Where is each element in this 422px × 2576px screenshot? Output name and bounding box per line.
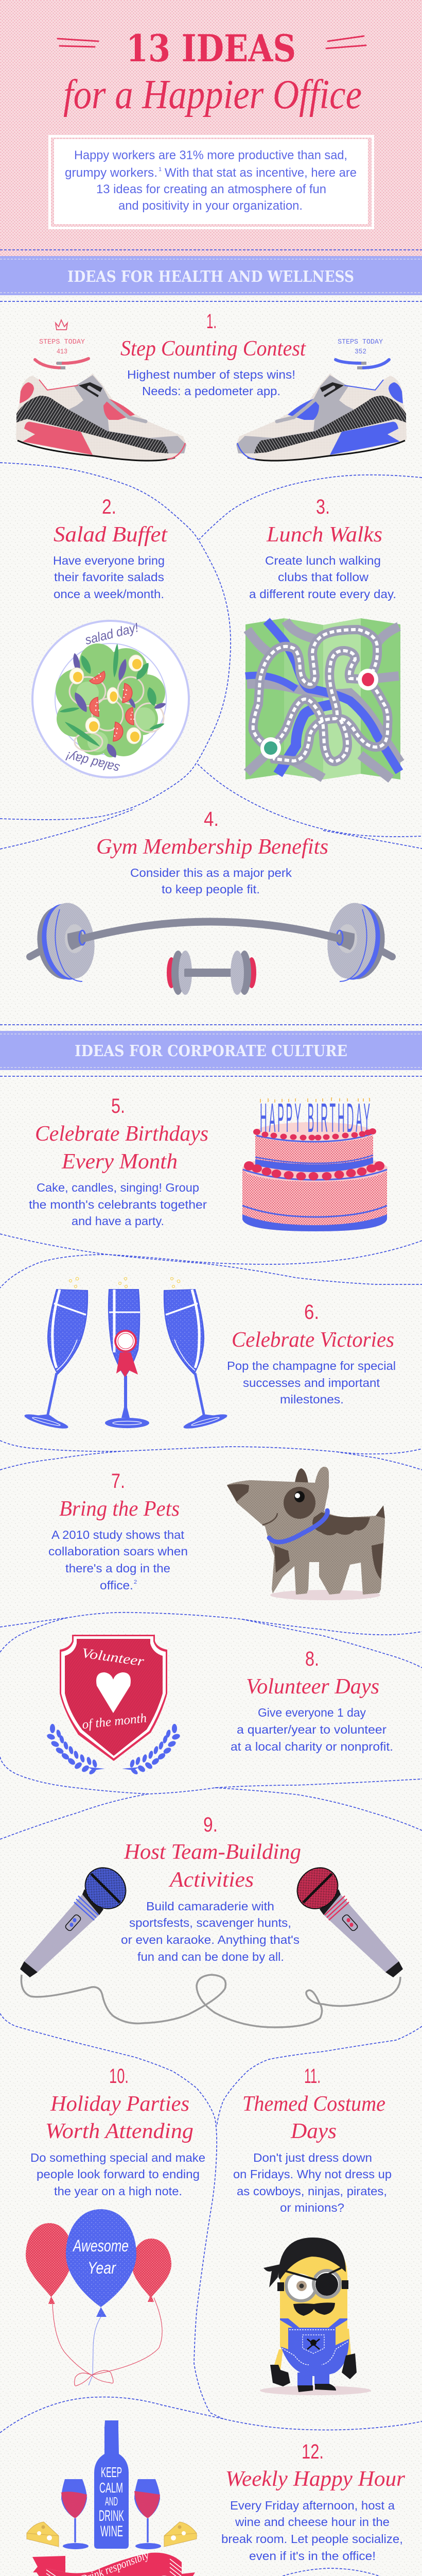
dog body [227, 1467, 385, 1595]
wreath left [46, 1724, 105, 1775]
bib and trousers [281, 2328, 349, 2376]
right step readout: STEPS TODAY [338, 338, 383, 346]
dashed dividers: ideas 9 to 11 [0, 2013, 422, 2433]
band heading: IDEAS FOR CORPORATE CULTURE [75, 1042, 347, 1060]
heading birthdays [35, 1122, 208, 1174]
body: collaboration soars when [48, 1545, 188, 1558]
intro text: and positivity in your organization. [118, 199, 303, 213]
left glass [23, 1290, 87, 1431]
shield bottom lettering: of the month [81, 1711, 147, 1732]
heading pets: Bring the Pets [59, 1497, 180, 1521]
icon: right fitness band [336, 338, 389, 368]
heading victories: Celebrate Victories [232, 1328, 394, 1352]
eye patch [285, 2268, 341, 2296]
body: successes and important [243, 1376, 380, 1389]
body: and have a party. [72, 1214, 164, 1228]
nose [227, 1484, 249, 1502]
minion body [280, 2241, 347, 2365]
left step readout: STEPS TODAY [39, 338, 85, 346]
tomato slices [86, 667, 140, 742]
lower cherries [244, 1161, 384, 1180]
cheese left [27, 2522, 59, 2547]
intro text: 13 ideas for creating an atmosphere of fun [96, 182, 326, 196]
body: wine and cheese hour in the [235, 2515, 390, 2529]
heading birthdays: Every Month [61, 1150, 178, 1174]
body: fun and can be done by all. [137, 1950, 284, 1963]
egg halves [69, 655, 143, 744]
map panels [245, 618, 284, 779]
body: break room. Let people socialize, [221, 2532, 403, 2546]
heading happy hour: Weekly Happy Hour [225, 2467, 406, 2491]
intro text: With that stat as incentive, here are [165, 166, 357, 180]
body [121, 1900, 300, 1963]
icon: wine bottle and cheese [27, 2420, 197, 2576]
number 9: 9. [203, 1814, 218, 1836]
bottle label: CALM [99, 2480, 123, 2496]
body: or minions? [280, 2201, 344, 2214]
icon: dog [227, 1467, 385, 1600]
onion rings [69, 677, 164, 751]
heading themed costume: Days [290, 2120, 337, 2143]
plate [32, 621, 189, 777]
body [233, 2151, 392, 2214]
body: Give everyone 1 day [258, 1706, 366, 1719]
body: or even karaoke. Anything that's [121, 1933, 300, 1946]
bottle label [99, 2464, 124, 2540]
gloves [270, 2353, 357, 2386]
body [221, 2499, 403, 2563]
back patch [312, 1512, 370, 1535]
intro panel [49, 136, 373, 228]
dashed dividers: ideas 12 to 13 [0, 2568, 422, 2576]
shield border [61, 1636, 166, 1758]
body: Pop the champagne for special [227, 1359, 396, 1372]
icon: microphones [20, 1859, 403, 2027]
candle lettering: HAPPY BIRTHDAY [260, 1095, 370, 1141]
heading themed costume [242, 2092, 385, 2143]
number 10: 10. [109, 2065, 129, 2088]
candle flames [260, 1097, 370, 1103]
intro text [65, 148, 357, 213]
idea 2 text [53, 496, 168, 601]
body: a quarter/year to volunteer [237, 1723, 386, 1736]
bottle label: DRINK [99, 2507, 124, 2524]
rosette ribbon [114, 1330, 138, 1377]
walking route dashes [253, 630, 388, 761]
shield outer [60, 1635, 167, 1761]
rivers [245, 621, 399, 774]
arms [273, 2329, 351, 2370]
intro white box [54, 139, 368, 224]
body: their favorite salads [54, 570, 164, 584]
heading step counting: Step Counting Contest [120, 337, 306, 361]
number 6: 6. [304, 1301, 319, 1324]
dashed dividers: health ideas [0, 463, 422, 849]
heading team building: Activities [168, 1868, 254, 1892]
idea 4 text [96, 808, 328, 896]
overalls [280, 2318, 349, 2376]
minion shadow [260, 2386, 371, 2395]
number 11: 11. [304, 2065, 321, 2088]
bottle label: WINE [100, 2523, 123, 2540]
idea 8 text [231, 1648, 393, 1753]
right band arcs [336, 360, 363, 363]
idea 10 text [30, 2065, 205, 2198]
blue microphone [20, 1859, 134, 1977]
icon: left fitness band: 413 [57, 348, 67, 356]
dashed dividers: ideas 8 to 9 [0, 1757, 422, 1839]
header background [0, 0, 422, 256]
heading themed costume: Themed Costume [242, 2092, 385, 2116]
plate lettering: salad day! [65, 749, 121, 776]
idea 12 text [221, 2441, 406, 2563]
blue balloon [66, 2209, 136, 2317]
heading holiday parties: Worth Attending [45, 2120, 194, 2143]
number 3: 3. [316, 496, 330, 518]
plate lettering: salad day! [83, 620, 140, 648]
number 1: 1. [206, 310, 217, 333]
tail tip and leg patches [274, 1505, 385, 1579]
body: the month's celebrants together [29, 1198, 207, 1211]
bubbles [69, 1277, 180, 1288]
body: Create lunch walking [265, 554, 381, 567]
body: Don't just dress down [253, 2151, 372, 2164]
body [231, 1706, 393, 1753]
shoes [297, 2384, 336, 2392]
body: A 2010 study shows that [51, 1528, 185, 1541]
bandana [278, 2238, 346, 2280]
middle glass [105, 1290, 149, 1428]
title line two: for a Happier Office [63, 72, 362, 117]
right glass [164, 1290, 228, 1431]
goggles [277, 2268, 348, 2301]
number 12: 12. [302, 2441, 324, 2463]
straps [280, 2318, 347, 2329]
body: Needs: a pedometer app. [142, 384, 280, 398]
intro text: 1 [159, 166, 162, 173]
balloon lettering: Awesome [72, 2236, 129, 2255]
title accent marks [58, 36, 366, 48]
icon: barbell [30, 900, 392, 983]
icon: volunteer shield [46, 1635, 181, 1775]
body: there's a dog in the [65, 1562, 170, 1575]
moustache [293, 2302, 335, 2316]
idea 3 text [249, 496, 396, 601]
icon: right fitness band: 352 [355, 348, 366, 356]
idea 1 text [120, 310, 306, 398]
body [227, 1359, 396, 1406]
body [127, 368, 295, 398]
idea 5 text [29, 1095, 208, 1228]
wine glass left [61, 2479, 89, 2549]
body: sportsfests, scavenger hunts, [129, 1916, 291, 1929]
right red balloon [132, 2239, 171, 2302]
start pin [260, 737, 281, 759]
balloon strings [52, 2298, 162, 2386]
body: to keep people fit. [162, 883, 260, 896]
idea 11 text [233, 2065, 392, 2214]
icon: pirate minion [260, 2238, 371, 2395]
idea 9 text [121, 1814, 301, 1963]
balloon lettering: Year [87, 2259, 116, 2277]
dashed dividers: ideas 7 to 8 [0, 1613, 422, 1668]
heading team building [124, 1840, 301, 1892]
number 8: 8. [305, 1648, 319, 1670]
heading volunteer days: Volunteer Days [246, 1675, 379, 1699]
icon: birthday cake [242, 1095, 388, 1231]
intro text: Happy workers are 31% more productive than sad, [74, 148, 347, 162]
walking route road [253, 630, 388, 761]
body [29, 1181, 207, 1228]
number 4: 4. [204, 808, 219, 831]
bottle label: AND [105, 2495, 118, 2508]
shield inner [65, 1639, 163, 1756]
section band: health and wellness [0, 250, 422, 301]
icon: left sneaker [16, 374, 186, 461]
far ear [295, 1468, 308, 1484]
shield top lettering: Volunteer [81, 1645, 145, 1669]
section band: corporate culture [0, 1025, 422, 1076]
eye patch [284, 1487, 315, 1519]
body: Have everyone bring [53, 554, 165, 567]
upper cherries [253, 1128, 376, 1141]
heading salad buffet: Salad Buffet [54, 523, 168, 547]
icon: salad plate [32, 620, 189, 777]
idea 6 text [227, 1301, 396, 1406]
eye [294, 1491, 305, 1502]
background roads [247, 621, 400, 779]
body [30, 2151, 205, 2198]
body: on Fridays. Why not dress up [233, 2167, 392, 2181]
lower tier [242, 1170, 387, 1231]
body [130, 866, 292, 896]
icon: folded map [245, 618, 400, 779]
body: as cowboys, ninjas, pirates, [237, 2184, 387, 2198]
heading gym: Gym Membership Benefits [96, 835, 328, 859]
end pin [358, 669, 378, 690]
body: a different route every day. [249, 587, 396, 601]
overall stitching [282, 2330, 348, 2365]
barbell left plate [30, 900, 99, 983]
body: the year on a high note. [54, 2184, 182, 2198]
dog shadow [270, 1590, 380, 1600]
number 5: 5. [111, 1095, 125, 1117]
bottle label: KEEP [101, 2464, 122, 2480]
body: people look forward to ending [37, 2167, 200, 2181]
banner [32, 2548, 195, 2576]
idea 7 text [48, 1470, 188, 1592]
band heading: IDEAS FOR HEALTH AND WELLNESS [67, 268, 354, 286]
legs [297, 2372, 329, 2385]
title [58, 26, 366, 117]
body: clubs that follow [278, 570, 368, 584]
intro text: grumpy workers. [65, 166, 157, 180]
body: at a local charity or nonprofit. [231, 1740, 393, 1753]
number 2: 2. [102, 496, 116, 518]
left red balloon [26, 2223, 73, 2304]
icon: left fitness band [35, 320, 89, 368]
number 7: 7. [111, 1470, 125, 1493]
plate lettering [65, 620, 140, 776]
body: Highest number of steps wins! [127, 368, 295, 381]
salad greens [56, 643, 165, 757]
dashed dividers: ideas 5 to 6 [0, 1234, 422, 1288]
body [249, 554, 396, 601]
body: Do something special and make [30, 2151, 205, 2164]
body: milestones. [280, 1393, 344, 1406]
iris [296, 2281, 307, 2291]
title line one: 13 IDEAS [126, 26, 296, 70]
dark green herbs [59, 643, 165, 749]
heart [96, 1672, 131, 1713]
icon: dumbbell [167, 951, 256, 995]
dashed dividers: ideas 6 to 7 [0, 1440, 422, 1470]
body [48, 1528, 188, 1592]
icon: right sneaker [236, 374, 407, 461]
body [53, 554, 165, 601]
mic cable [21, 1975, 400, 2027]
barbell right plate [323, 900, 392, 983]
smile [262, 1513, 277, 1525]
heading birthdays: Celebrate Birthdays [35, 1122, 208, 1146]
heading holiday parties [45, 2092, 194, 2143]
body: 2 [134, 1579, 137, 1585]
overall pocket and skull [303, 2335, 324, 2353]
heading holiday parties: Holiday Parties [50, 2092, 189, 2116]
barbell bar [82, 922, 340, 939]
intro frame [49, 136, 373, 228]
heading team building: Host Team-Building [124, 1840, 301, 1864]
icon: champagne glasses [23, 1277, 228, 1431]
crown [56, 320, 67, 330]
icon: balloons [26, 2209, 171, 2386]
purple basil leaves [72, 652, 167, 759]
band arcs [35, 360, 63, 368]
body: office. [100, 1579, 133, 1592]
heading lunch walks: Lunch Walks [266, 523, 382, 547]
body: Every Friday afternoon, host a [230, 2499, 395, 2512]
body: Build camaraderie with [146, 1900, 274, 1913]
cheese right [164, 2522, 197, 2547]
body: once a week/month. [54, 587, 164, 601]
body: Consider this as a major perk [130, 866, 292, 879]
wine glass right [134, 2479, 161, 2549]
body: Cake, candles, singing! Group [37, 1181, 199, 1194]
upper tier [255, 1136, 373, 1172]
red microphone [289, 1859, 403, 1977]
bottle [94, 2420, 129, 2549]
balloon lettering [72, 2236, 129, 2277]
body: even if it's in the office! [249, 2549, 376, 2563]
wreath right [122, 1724, 181, 1775]
collar [269, 1511, 327, 1542]
